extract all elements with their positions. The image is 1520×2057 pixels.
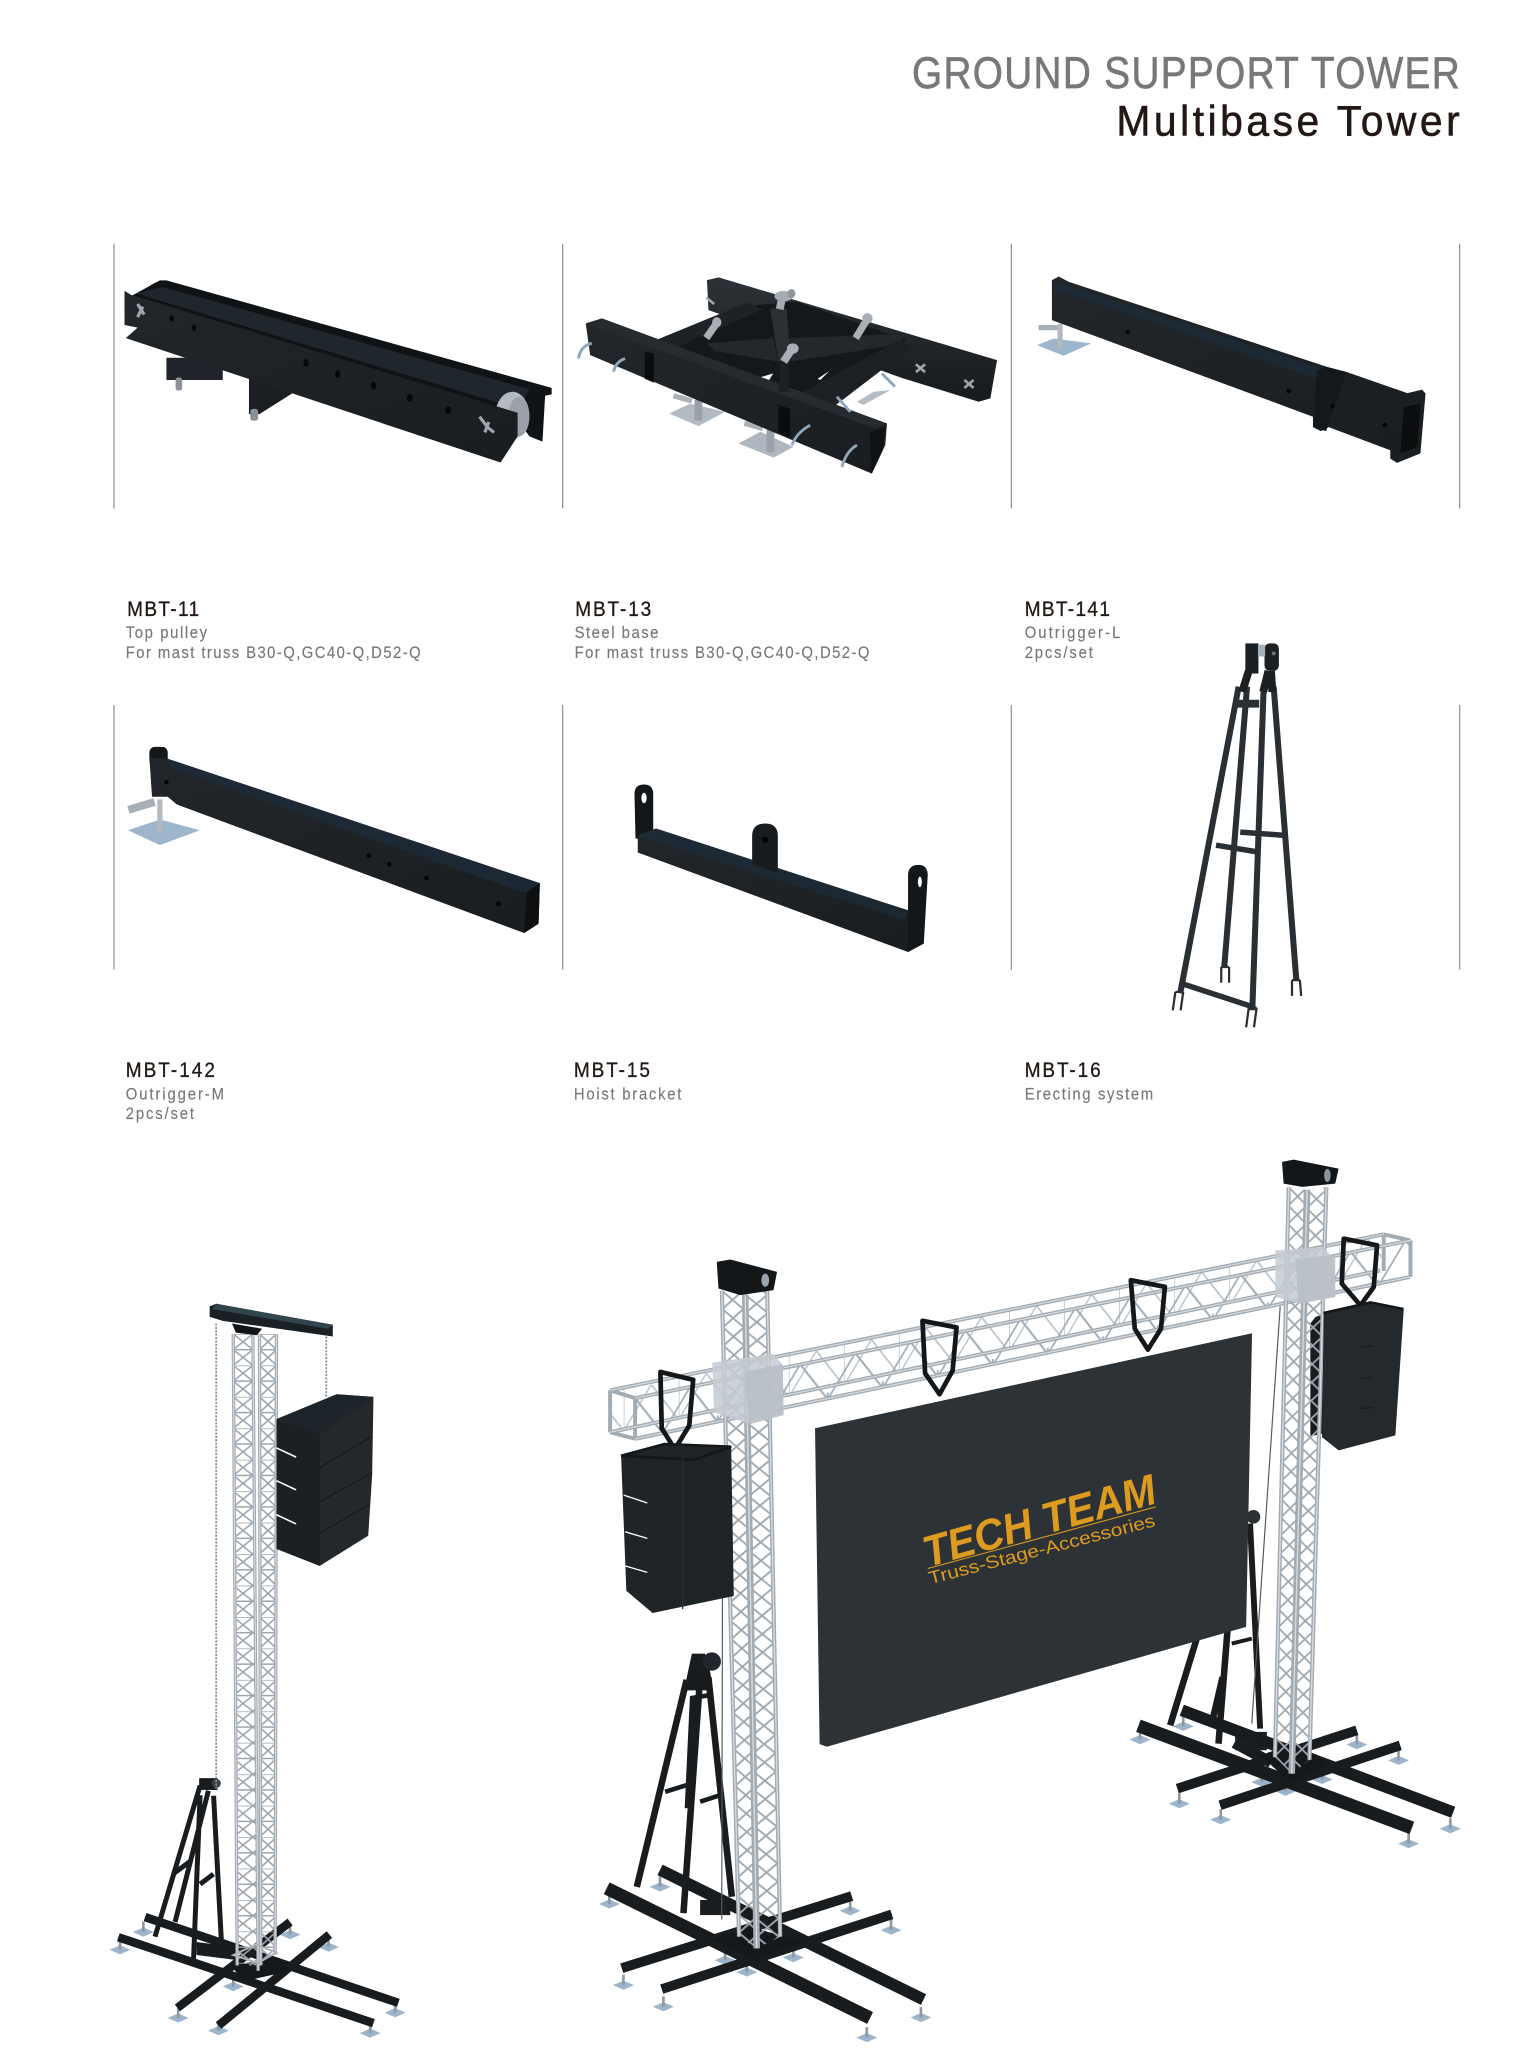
- label: MBT-13: Steel base: [575, 624, 659, 642]
- label: MBT-141: MBT-141: [1025, 598, 1110, 621]
- label: MBT-16: MBT-16: [1025, 1059, 1101, 1082]
- tower heads: [717, 1160, 1339, 1295]
- top pulley beam: [210, 1304, 333, 1337]
- label: MBT-141: [1025, 598, 1121, 662]
- title: [912, 47, 1460, 145]
- left tower mast: [722, 1291, 780, 1948]
- heading: multibase tower: Multibase Tower: [1116, 97, 1460, 145]
- main horizontal truss: [610, 1234, 1410, 1439]
- product: MBT-142 outrigger M: [128, 747, 540, 933]
- hanging straps: [660, 1239, 1377, 1449]
- right speaker stack: [1322, 1302, 1404, 1450]
- illustration: single tower with speakers: [110, 1304, 406, 2038]
- label: MBT-15: Hoist bracket: [574, 1086, 682, 1104]
- label: MBT-15: [574, 1059, 682, 1104]
- LED screen: [815, 1333, 1252, 1747]
- chain: [216, 1323, 326, 1789]
- label: MBT-142: Outrigger-M: [126, 1086, 224, 1104]
- label: MBT-16: Erecting system: [1025, 1086, 1153, 1104]
- product: MBT-16 erecting system: [1173, 643, 1301, 1027]
- label: MBT-142: 2pcs/set: [126, 1105, 195, 1123]
- left speaker stack: [621, 1444, 734, 1613]
- logo: TECH TEAM: [918, 1466, 1162, 1577]
- label: MBT-13: [575, 598, 869, 662]
- product: MBT-13 steel base: [579, 277, 997, 474]
- label: MBT-11: For mast truss B30-Q,GC40-Q,D52-Q: [126, 644, 421, 662]
- icon: base feet: [110, 1922, 406, 2038]
- label: MBT-142: MBT-142: [126, 1059, 215, 1082]
- label: MBT-141: 2pcs/set: [1025, 644, 1093, 662]
- product: MBT-15 hoist bracket: [634, 785, 928, 952]
- label: MBT-11: Top pulley: [126, 624, 207, 642]
- sleeve blocks: [712, 1247, 1335, 1424]
- label: MBT-142: [126, 1059, 224, 1123]
- right tower mast: [1275, 1187, 1326, 1774]
- label: MBT-13: MBT-13: [575, 598, 651, 621]
- left erector frame: [637, 1448, 732, 1920]
- base beams: [118, 1917, 398, 2026]
- right erector frame: [1170, 1306, 1280, 1744]
- left tower base: [599, 1870, 931, 2042]
- label: MBT-16: [1025, 1059, 1153, 1104]
- logo: Truss-Stage-Accessories: [926, 1510, 1157, 1588]
- product: MBT-141 outrigger L: [1037, 276, 1426, 463]
- speakers stack: [276, 1394, 373, 1566]
- label: MBT-11: [126, 598, 421, 662]
- heading: ground support tower: GROUND SUPPORT TOWER: [912, 47, 1460, 97]
- product: MBT-11 top pulley: [124, 280, 552, 463]
- illustration: double tower gantry with LED screen: [599, 1160, 1461, 2042]
- right tower base: [1130, 1710, 1461, 1848]
- truss mast: [233, 1334, 276, 1971]
- label: MBT-11: MBT-11: [127, 598, 199, 621]
- product labels row 1: [126, 598, 1121, 662]
- label: MBT-15: MBT-15: [574, 1059, 650, 1082]
- erector frame: [155, 1778, 222, 1962]
- label: MBT-13: For mast truss B30-Q,GC40-Q,D52-Q: [575, 644, 869, 662]
- product labels row 2: [126, 1059, 1153, 1123]
- label: MBT-141: Outrigger-L: [1025, 624, 1121, 642]
